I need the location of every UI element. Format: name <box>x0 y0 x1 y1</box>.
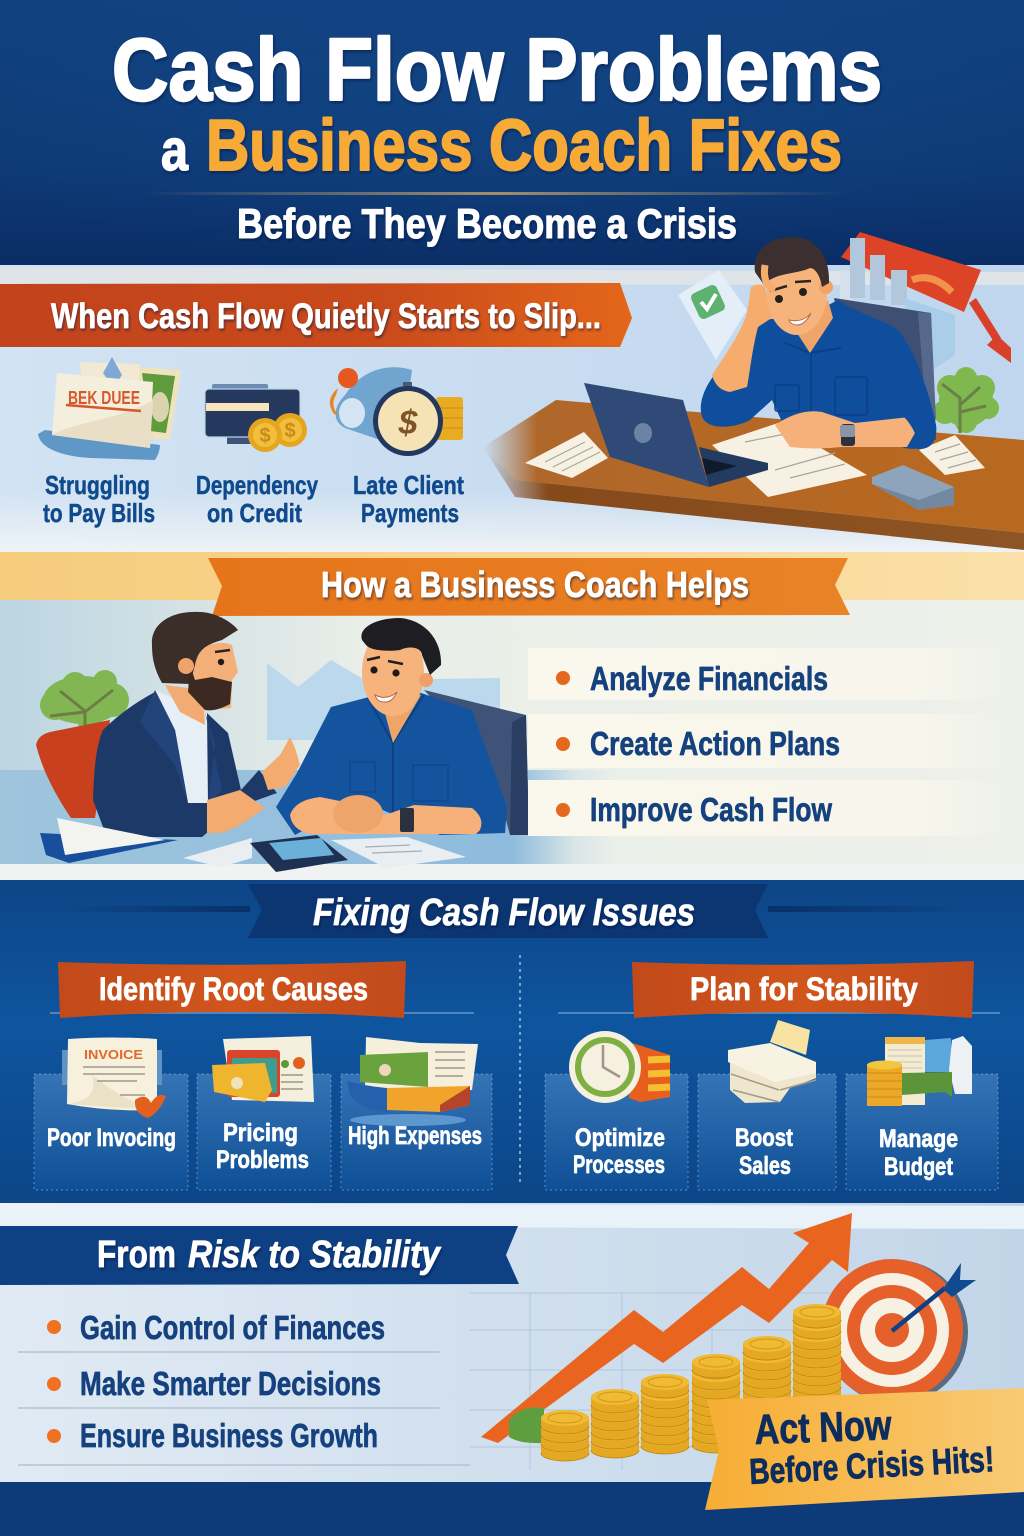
card: pricing problems: Pricing <box>223 1119 298 1147</box>
list: outcomes <box>47 1309 385 1454</box>
banner: identify root causes <box>58 961 406 1018</box>
title line 2: a <box>161 118 189 183</box>
label: dependency on credit: Dependency <box>196 470 318 500</box>
card: high expenses <box>341 1037 492 1190</box>
card: manage budget <box>846 1036 998 1190</box>
callout: act now <box>705 1388 1024 1510</box>
card: pricing problems: Problems <box>216 1146 309 1174</box>
column: plan for stability <box>545 961 1000 1190</box>
card: poor invoicing: INVOICE <box>84 1047 143 1062</box>
callout: act now: Act Now <box>754 1401 893 1453</box>
heading: from risk to stability: From <box>97 1234 176 1276</box>
heading: from risk to stability <box>0 1226 519 1285</box>
icon: credit card and coins <box>205 384 307 452</box>
panel: how a business coach helps <box>0 552 1024 882</box>
panel: from risk to stability <box>0 1203 1024 1536</box>
banner: when cash flow: When Cash Flow Quietly Starts to Slip... <box>51 297 601 336</box>
heading: fixing cash flow issues <box>60 884 968 938</box>
heading: fixing cash flow issues: Fixing Cash Flow Issues <box>313 892 695 934</box>
label: struggling to pay bills: Struggling <box>45 470 150 500</box>
list row: create action plans: Create Action Plans <box>590 725 840 762</box>
icon: clock and client payments: $ <box>398 404 419 442</box>
bottom band <box>0 1482 1024 1536</box>
label: late client payments <box>353 470 464 528</box>
panel: when cash flow starts to slip <box>0 232 1024 553</box>
banner: when cash flow <box>0 283 632 347</box>
card: pricing problems <box>197 1036 331 1190</box>
list row: improve cash flow <box>528 780 1008 836</box>
label: struggling to pay bills: to Pay Bills <box>43 498 155 528</box>
icon: past due bill: BEK DUEE <box>68 388 140 408</box>
list row: analyze financials: Analyze Financials <box>590 660 828 697</box>
icon: cash under arrow <box>509 1408 544 1443</box>
banner: how a coach helps: How a Business Coach Helps <box>321 564 749 605</box>
panel: header <box>0 0 1024 270</box>
heading: from risk to stability: Risk to Stability <box>188 1234 442 1276</box>
list: outcomes: Ensure Business Growth <box>80 1417 378 1454</box>
banner: how a coach helps <box>208 558 850 616</box>
icon: growth arrow <box>481 1213 852 1443</box>
label: struggling to pay bills <box>43 470 155 528</box>
plant <box>40 670 129 734</box>
card: boost sales <box>698 1020 836 1190</box>
list row: create action plans <box>528 714 1008 768</box>
card: optimize processes: Processes <box>573 1151 665 1179</box>
list: outcomes: Make Smarter Decisions <box>80 1365 381 1402</box>
banner: plan for stability: Plan for Stability <box>690 971 918 1007</box>
card: manage budget: Manage <box>879 1125 958 1153</box>
icon: credit card and coins: $ <box>259 425 271 447</box>
chart: coin stacks <box>541 1304 841 1461</box>
icon: credit card and coins: $ <box>284 420 296 442</box>
list row: analyze financials <box>528 648 1008 700</box>
column: identify root causes <box>34 961 492 1190</box>
icon: past due bill <box>38 357 181 460</box>
illustration: coach and client <box>36 612 529 872</box>
card: boost sales: Boost <box>735 1124 794 1152</box>
banner: identify root causes: Identify Root Causes <box>99 971 368 1007</box>
list row: improve cash flow: Improve Cash Flow <box>590 791 832 828</box>
icon: clock and client payments <box>330 367 463 456</box>
card: optimize processes: Optimize <box>575 1124 665 1152</box>
label: late client payments: Payments <box>361 498 459 528</box>
card: optimize processes <box>545 1031 688 1190</box>
chart backdrop <box>267 660 500 740</box>
card: manage budget: Budget <box>884 1153 954 1181</box>
card: high expenses: High Expenses <box>348 1122 482 1150</box>
list: outcomes: Gain Control of Finances <box>80 1309 385 1346</box>
illustration: stressed owner at desk <box>483 232 1024 550</box>
title line 2: Business Coach Fixes <box>206 106 842 186</box>
label: dependency on credit <box>196 470 318 528</box>
label: late client payments: Late Client <box>353 470 464 500</box>
panel: fixing cash flow issues <box>0 880 1024 1206</box>
card: poor invoicing: Poor Invocing <box>47 1124 176 1152</box>
banner: plan for stability <box>632 961 974 1018</box>
title line 1: Cash Flow Problems <box>112 20 882 119</box>
subtitle: Before They Become a Crisis <box>237 200 737 247</box>
label: dependency on credit: on Credit <box>207 498 302 528</box>
icon: target and dart <box>821 1259 976 1404</box>
card: poor invoicing <box>34 1038 188 1190</box>
card: boost sales: Sales <box>739 1152 791 1180</box>
